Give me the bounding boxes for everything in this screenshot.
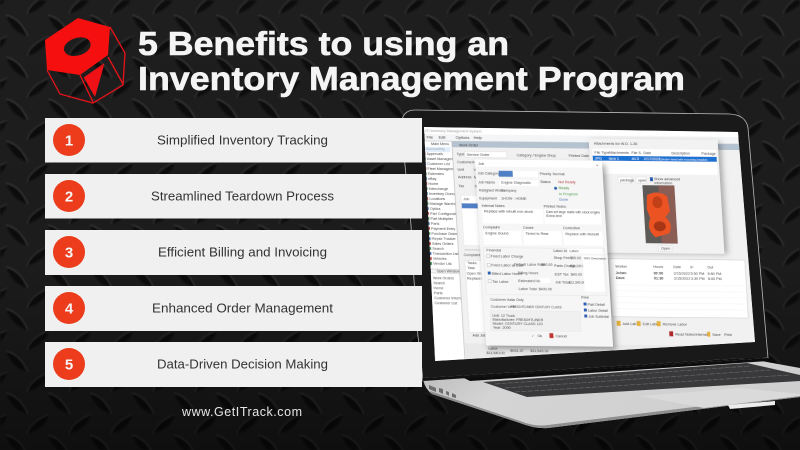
bottom toolbar: Save	[712, 333, 721, 337]
side buttons: Edit Info	[692, 206, 705, 210]
open windows panel	[430, 270, 465, 361]
badge: 2	[53, 180, 85, 212]
photo attachment dialog: File S.	[631, 151, 642, 155]
job dialog: EST Tax	[555, 272, 569, 276]
main menu panel: eBay	[428, 177, 437, 181]
laptop screen	[419, 127, 759, 366]
service order window: Add Job	[472, 333, 486, 337]
job dialog: In Progress	[559, 192, 578, 196]
labor table: Johan	[616, 271, 627, 275]
photo attachment dialog: File Type	[594, 151, 609, 155]
job dialog: Engine Diagnostic	[501, 181, 531, 185]
photo attachment dialog: Package	[701, 152, 716, 156]
icon: red hex nut logo	[45, 18, 125, 103]
open windows panel: Home	[434, 286, 444, 290]
photo attachment dialog: 84.5	[632, 157, 639, 161]
job dialog: Job Category	[478, 172, 500, 176]
main menu panel: Parts	[431, 222, 440, 226]
badge: 1: 1	[65, 132, 73, 150]
menu bar	[426, 136, 482, 140]
job dialog: Company	[501, 189, 517, 193]
job dialog: Ok	[537, 334, 542, 338]
job dialog: Job Name	[478, 181, 495, 185]
panel: benefit 3	[45, 230, 422, 275]
open windows panel: Customer Information	[434, 296, 470, 300]
labor table: Date	[673, 265, 681, 269]
menu bar: File	[426, 135, 434, 140]
job dialog: Financial	[486, 249, 501, 253]
job dialog: Not Ready	[558, 180, 576, 184]
side buttons	[689, 195, 713, 221]
job dialog: Equipment	[479, 197, 497, 201]
job dialog: Labor Total	[519, 287, 537, 291]
job dialog: Shop Fee 2	[554, 256, 573, 260]
job dialog: Default Labor Rate	[514, 263, 545, 267]
job dialog: Replace with rebuilt non-stock	[484, 210, 533, 214]
laptop base	[423, 358, 800, 428]
ports	[429, 385, 456, 398]
service order window: Customer	[457, 160, 474, 164]
photo attachment dialog: Attachments for W.O. 1-36	[594, 142, 637, 146]
job dialog: Unit: 12 Truck	[492, 314, 515, 318]
service order window: Open Sh	[467, 271, 481, 275]
photo attachment dialog: Date	[643, 151, 651, 155]
title: 5 Benefits to using an	[138, 25, 509, 62]
badge: 4: 4	[65, 300, 74, 318]
side buttons: Remove Info	[692, 216, 713, 220]
job dialog: $11,100.00	[570, 264, 586, 269]
job dialog: Part Detail	[587, 303, 605, 307]
labor table	[609, 259, 748, 318]
main menu panel: Manage Warehouse	[430, 202, 463, 206]
label: benefit 4: Enhanced Order Management	[152, 302, 334, 316]
job dialog: Ready	[558, 186, 570, 190]
job dialog: Customer Unit:	[491, 305, 515, 309]
main menu panel: Vendor List	[433, 262, 452, 266]
totals strip: Labor	[488, 347, 499, 351]
totals strip: $931.37	[510, 349, 524, 353]
labor table: 5:50 PM	[708, 272, 721, 276]
bottom toolbar: Read Notes	[675, 332, 695, 337]
badge: 1	[53, 124, 85, 156]
main menu panel: Part Configuration	[430, 212, 460, 216]
main menu panel: Home	[428, 182, 438, 186]
service order window: Tasks	[467, 261, 477, 265]
main menu panel: Repair Tracker	[432, 237, 457, 241]
labor table: 5:00 PM	[708, 277, 722, 281]
labor buttons: Remove Labor	[663, 322, 688, 327]
service order window	[452, 141, 759, 366]
job list	[461, 195, 481, 245]
panel: benefit 1	[45, 118, 422, 162]
photo attachment dialog: open	[638, 179, 646, 183]
main menu panel	[424, 140, 460, 270]
job dialog: Labor	[569, 249, 580, 253]
job dialog: $35.00	[570, 256, 581, 260]
main menu panel: Optics	[430, 207, 441, 211]
labor table: Worker	[615, 265, 628, 269]
service order window: Work Order	[459, 143, 479, 148]
job dialog: FREIGHTLINER CENTURY CLASS	[511, 305, 562, 309]
job dialog: Manufacturer: FREIGHTLINER	[492, 318, 544, 322]
labor buttons	[617, 321, 688, 327]
photo attachment dialog: Item 1	[609, 157, 619, 161]
photo attachment dialog: information	[654, 181, 673, 185]
job dialog	[475, 159, 616, 350]
job dialog: Printed Notes	[544, 205, 566, 209]
main menu panel: Sales Orders	[432, 242, 454, 246]
job dialog: Correction	[563, 226, 580, 230]
service order window: Heav	[473, 160, 482, 165]
badge: 3: 3	[65, 244, 73, 262]
front highlight	[728, 401, 775, 409]
job dialog: Parts Charge	[554, 264, 576, 268]
job dialog: Complaint	[483, 226, 500, 230]
main menu panel: Estimates	[428, 172, 444, 176]
job dialog: Internal Notes	[482, 204, 505, 208]
window title bar: ITI Inventory Management System	[425, 129, 482, 134]
badge: 2: 2	[65, 188, 73, 206]
job dialog: Fixed Labor at Cost	[491, 264, 524, 268]
job dialog: Status	[540, 180, 551, 184]
job dialog: Billing Hours	[518, 271, 539, 275]
website url: www.GetITrack.com	[181, 405, 302, 419]
main menu panel: Locations	[429, 197, 445, 201]
totals strip: $11,540.00	[486, 351, 505, 355]
open windows panel: Search	[433, 281, 445, 285]
main menu panel: Inventory Overview	[429, 192, 461, 196]
badge: 3	[53, 236, 85, 268]
job dialog: Timed to Rear	[525, 232, 549, 236]
main menu panel: Interchange	[429, 187, 448, 191]
photo attachment dialog: Show advanced	[654, 177, 680, 182]
labor table: 3:30 PM	[691, 277, 705, 281]
job dialog: Replace with Rebuilt	[565, 232, 599, 237]
bottom toolbar: Internal	[695, 333, 708, 337]
job dialog: Job	[478, 162, 484, 166]
labor table: 01:30	[654, 276, 663, 280]
labor table: 00:00	[654, 271, 663, 275]
job dialog: $40.00	[571, 272, 582, 276]
title	[138, 25, 685, 97]
labor table: 5:50 PM	[691, 272, 704, 276]
menu bar: Edit	[438, 135, 447, 140]
main menu panel: Payment Entry	[431, 227, 456, 231]
service order window: Category / Engine Shop	[517, 153, 556, 158]
job dialog: Print	[581, 295, 589, 300]
job dialog: Done	[559, 198, 568, 202]
label: benefit 2: Streamlined Teardown Process	[151, 190, 334, 204]
photo attachment dialog: package	[620, 178, 634, 183]
panel: benefit 2	[45, 174, 422, 218]
title: Inventory Management Program	[138, 60, 685, 97]
photo attachment dialog: Cylinder head with mounting bracket	[659, 157, 708, 162]
job dialog: 1HOW - HOME	[501, 197, 527, 201]
job dialog: ✓	[531, 334, 535, 338]
labor table: Out	[707, 266, 713, 270]
photo attachment dialog: 2/17/2022	[644, 157, 660, 161]
job dialog: Estimated Hours	[518, 279, 546, 283]
labor buttons: Edit Labor	[643, 322, 660, 326]
job dialog: Extra text	[546, 214, 562, 218]
job dialog: Engine Sound	[485, 232, 509, 236]
photo attachment dialog	[589, 139, 727, 254]
job dialog: Normal	[553, 172, 565, 176]
labor table: 2/15/2022	[674, 276, 690, 281]
service order window: Printed Date	[569, 154, 589, 158]
photo attachment dialog: Attachments	[608, 151, 629, 155]
main menu panel: Purchase Orders	[431, 232, 460, 236]
job dialog: Priority	[540, 172, 551, 176]
label: benefit 3: Efficient Billing and Invoicing	[158, 246, 327, 260]
service order window: Unit	[457, 168, 464, 172]
main menu panel: Vehicles	[433, 257, 447, 261]
totals strip: $11,543.32	[530, 349, 549, 353]
laptop lid	[401, 110, 768, 381]
laptop mockup	[401, 110, 800, 428]
job dialog: Labor Id:	[553, 249, 568, 253]
job dialog: Year: 2000	[493, 326, 511, 330]
job dialog: Model: CENTURY CLASS 120	[493, 322, 543, 326]
window title bar	[420, 127, 745, 137]
panel: benefit 5	[45, 342, 422, 387]
service order window: Service Order	[467, 153, 490, 157]
job dialog: $11,540.00	[569, 280, 585, 285]
bottom toolbar: Print	[724, 333, 732, 337]
photo of orange part	[642, 185, 678, 243]
service order window: Tax	[458, 184, 465, 188]
badge: 5: 5	[65, 356, 73, 374]
main menu panel: Customer List	[427, 162, 450, 166]
totals strip	[485, 346, 619, 355]
labor buttons: Add Labor	[623, 322, 641, 326]
badge: 4	[53, 292, 85, 324]
service order window: Complaint, Cla	[464, 253, 489, 258]
badge: 5	[53, 348, 85, 380]
service order window: Sale	[474, 184, 482, 189]
service order window: Task	[467, 266, 475, 270]
open button: Open	[661, 247, 670, 251]
main menu panel: Asset Management	[427, 157, 459, 161]
job dialog: Assigned Worker	[479, 189, 508, 193]
menu bar: Help	[473, 135, 483, 140]
service order window: Mike	[474, 175, 482, 180]
job dialog: $80.00	[541, 263, 553, 267]
job dialog: Job Total	[555, 280, 570, 284]
job list: Job	[463, 197, 469, 201]
main menu panel: Fleet Management	[427, 167, 458, 171]
main menu panel: Search	[432, 247, 444, 251]
job dialog: SRG Description	[584, 257, 607, 261]
trackpad	[640, 388, 800, 408]
main menu panel: Part Multiplier	[430, 217, 454, 221]
labor table: 2/15/2022	[674, 271, 690, 276]
job dialog: Cause	[523, 226, 534, 230]
labor table: Hours	[653, 265, 663, 269]
job dialog: Labor Detail	[588, 309, 608, 313]
label: benefit 5: Data-Driven Decision Making	[157, 358, 328, 372]
service order window: Replace Eng	[467, 276, 488, 281]
keyboard	[483, 363, 800, 397]
job dialog: Cam set large matte with stock engine	[546, 210, 600, 215]
main menu panel: Transaction List	[433, 252, 459, 256]
service order window: Type	[457, 152, 465, 156]
photo attachment dialog: JPG	[595, 157, 602, 161]
menu bar: Options	[455, 135, 470, 140]
open windows panel: Customer List	[434, 301, 457, 305]
bottom toolbar	[669, 331, 732, 337]
photo attachment dialog: Description	[671, 151, 690, 156]
job dialog: Customer Asks Only	[490, 298, 524, 302]
panel: benefit 4	[45, 286, 422, 331]
service order window: VIN2	[473, 168, 482, 172]
main menu panel: Approvals	[427, 152, 443, 156]
open windows panel: Work Orders	[433, 276, 454, 280]
main menu panel: Accounting	[426, 147, 445, 151]
labor table: Dave	[616, 276, 625, 280]
open windows panel: Parts	[434, 291, 443, 295]
label: benefit 1: Simplified Inventory Tracking	[157, 134, 328, 148]
job dialog: Tax Labor	[492, 280, 509, 284]
open windows panel: Open Windows	[437, 269, 462, 273]
labor table: In	[690, 266, 693, 270]
service order window: Address	[458, 175, 472, 179]
job dialog: Cancel	[555, 334, 567, 338]
job dialog: Billed Labor Hours	[492, 272, 522, 276]
job dialog: Fixed Labor Charge	[491, 255, 523, 259]
job dialog: ×	[596, 164, 598, 168]
side buttons: Time Ext	[691, 196, 706, 200]
job dialog: Job Subtotal	[588, 315, 609, 319]
job dialog: $400.00	[539, 287, 552, 291]
main menu panel: Main Menu	[431, 142, 449, 146]
